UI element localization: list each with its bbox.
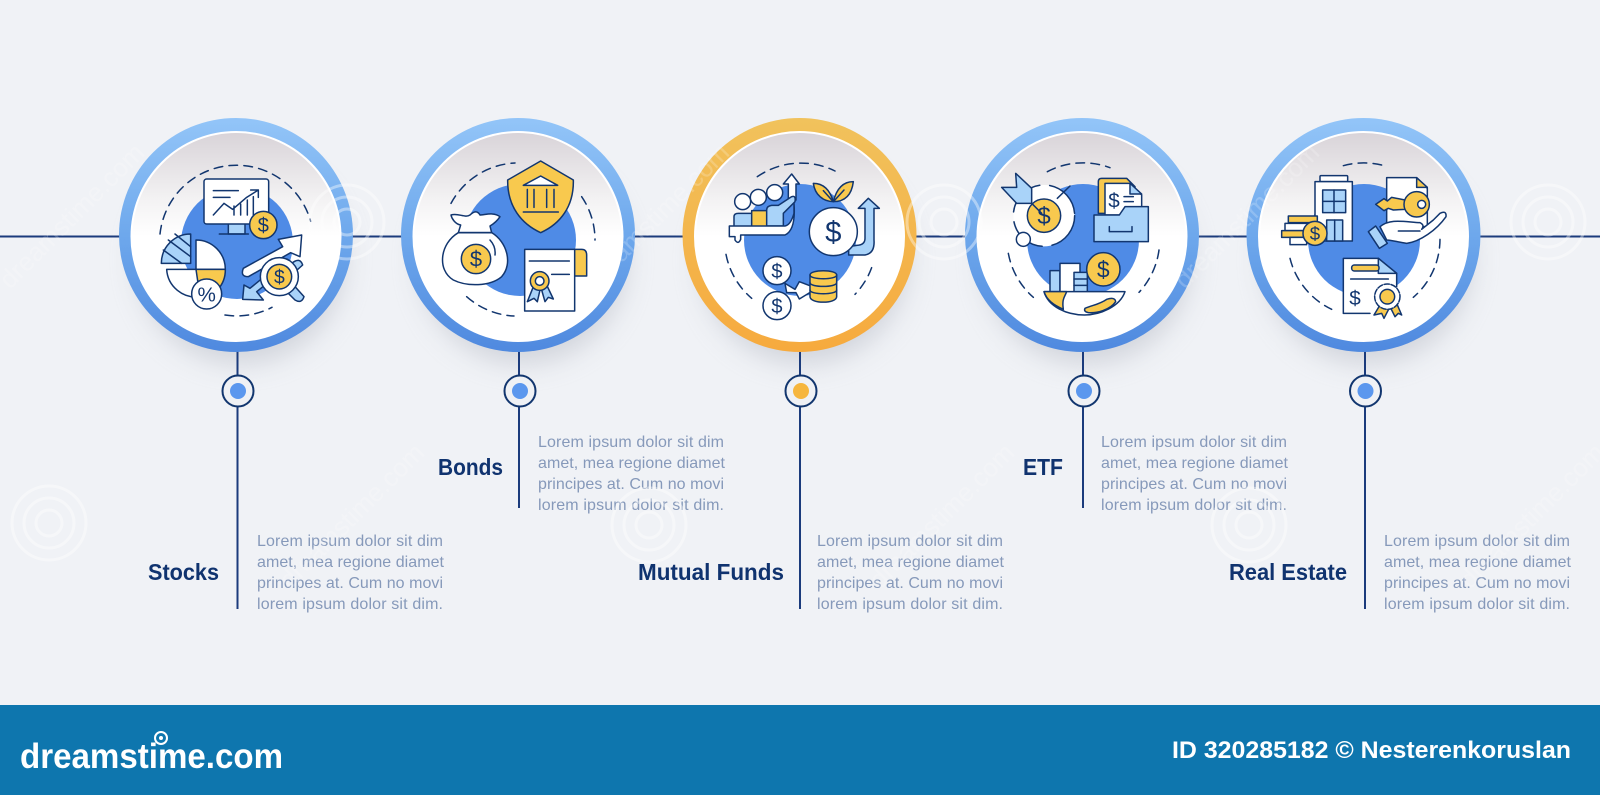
description: ETF: amet, mea regione diamet [1101, 455, 1289, 472]
description: ETF: principes at. Cum no movi [1101, 476, 1287, 493]
footer bar [0, 705, 1600, 795]
step 4: ETF [965, 118, 1289, 514]
description: Stocks: lorem ipsum dolor sit dim. [257, 596, 443, 613]
description: Real Estate: lorem ipsum dolor sit dim. [1384, 596, 1570, 613]
description: Mutual Funds: lorem ipsum dolor sit dim. [817, 596, 1003, 613]
watermark overlay: dreamstime.com [578, 137, 735, 294]
icon: building, key in hand and certificate [1282, 163, 1446, 318]
step 5: Real Estate [1229, 118, 1572, 613]
circle badge: Real Estate [1246, 118, 1480, 352]
icon: stock charts and coins: $ [274, 268, 285, 289]
connector and node: Real Estate [1264, 156, 1472, 609]
connector and node: Bonds [419, 156, 627, 508]
logo: dreamstime: dreamstime.com [20, 737, 283, 776]
icon: money bag, shield and certificate [443, 161, 595, 316]
label: Bonds: Bonds [438, 454, 503, 480]
image credit: ID 320285182 © Nesterenkoruslan [1172, 737, 1571, 764]
description: Real Estate: principes at. Cum no movi [1384, 575, 1570, 592]
description: Real Estate: amet, mea regione diamet [1384, 554, 1572, 571]
icon: building, key in hand and certificate: $ [1310, 223, 1321, 244]
icon: stock charts and coins: $ [258, 215, 269, 237]
connector and node: ETF [983, 156, 1191, 508]
label: Mutual Funds: Mutual Funds [638, 559, 784, 585]
circle badge: ETF [965, 118, 1199, 352]
icon: people, growing coin and coin stack [726, 163, 879, 320]
step 2: Bonds [401, 118, 726, 514]
icon: target, folder and globe with buildings: $ [1108, 189, 1120, 212]
description: Bonds: Lorem ipsum dolor sit dim [538, 434, 724, 451]
icon: building, key in hand and certificate: $ [1349, 287, 1361, 310]
timeline horizontal line [0, 236, 1600, 238]
watermark overlay: dreamstime.com [863, 437, 1020, 594]
description: Real Estate: Lorem ipsum dolor sit dim [1384, 533, 1570, 550]
icon: target, folder and globe with buildings: $ [1037, 203, 1051, 230]
description: ETF: lorem ipsum dolor sit dim. [1101, 497, 1287, 514]
description: Stocks: amet, mea regione diamet [257, 554, 445, 571]
description: Mutual Funds: Lorem ipsum dolor sit dim [817, 533, 1003, 550]
icon: money bag, shield and certificate: $ [470, 247, 482, 272]
description: Mutual Funds: amet, mea regione diamet [817, 554, 1005, 571]
icon: target, folder and globe with buildings [1002, 163, 1159, 315]
description: Bonds: amet, mea regione diamet [538, 455, 726, 472]
icon: target, folder and globe with buildings: $ [1097, 256, 1110, 282]
circle badge: Stocks [119, 118, 353, 352]
icon: people, growing coin and coin stack: $ [825, 216, 841, 249]
icon: people, growing coin and coin stack: $ [771, 261, 783, 283]
circle badge: Mutual Funds [682, 118, 916, 352]
icon: people, growing coin and coin stack: $ [771, 296, 783, 318]
watermark overlay: dreamstime.com [273, 437, 430, 594]
icon: stock charts and coins [160, 165, 311, 316]
description: Stocks: principes at. Cum no movi [257, 575, 443, 592]
circle badge: Bonds [401, 118, 635, 352]
watermark overlay [0, 137, 1600, 594]
label: ETF: ETF [1023, 454, 1063, 480]
label: Stocks: Stocks [148, 559, 219, 585]
step 3: Mutual Funds [638, 118, 1005, 613]
connector and node: Stocks [137, 156, 345, 609]
watermark overlay: dreamstime.com [1168, 137, 1325, 294]
description: Bonds: lorem ipsum dolor sit dim. [538, 497, 724, 514]
icon: stock charts and coins: % [197, 284, 216, 307]
connector and node: Mutual Funds [700, 156, 908, 609]
description: Stocks: Lorem ipsum dolor sit dim [257, 533, 443, 550]
label: Real Estate: Real Estate [1229, 559, 1347, 585]
description: ETF: Lorem ipsum dolor sit dim [1101, 434, 1287, 451]
description: Mutual Funds: principes at. Cum no movi [817, 575, 1003, 592]
step 1: Stocks [119, 118, 445, 613]
description: Bonds: principes at. Cum no movi [538, 476, 724, 493]
